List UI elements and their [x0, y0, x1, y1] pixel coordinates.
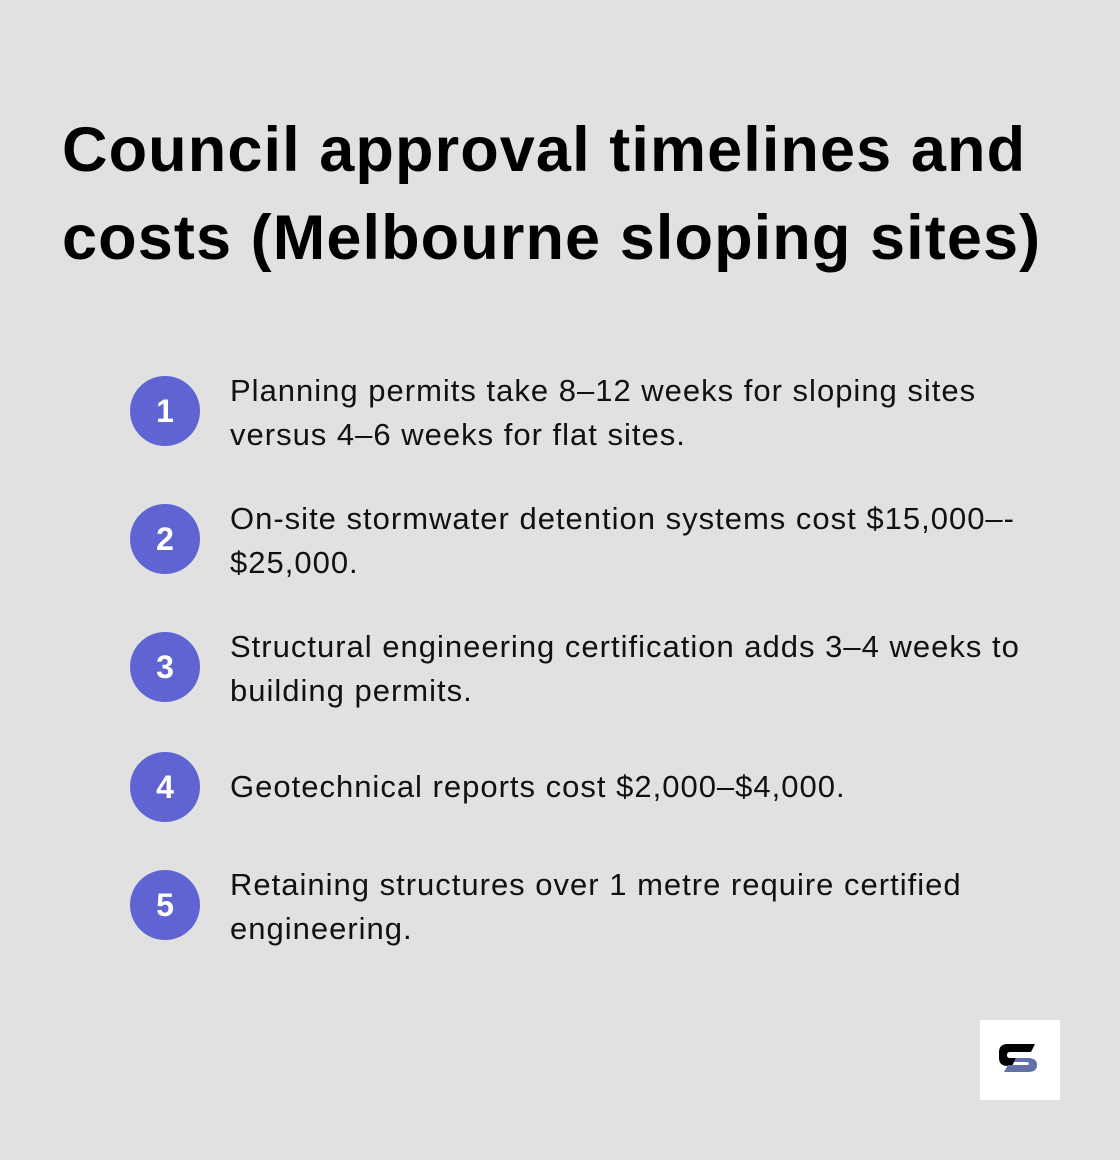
badge 4: 4: [156, 769, 174, 805]
badge 3: 3: [156, 649, 174, 685]
badge 1: [130, 376, 200, 446]
text 2: On-site stormwater detention systems cost $15,000–-: [230, 501, 1015, 536]
badge 2: 2: [156, 521, 174, 557]
item 4: [130, 752, 846, 822]
badge 2: [130, 504, 200, 574]
badge 4: [130, 752, 200, 822]
logo: [980, 1020, 1060, 1100]
badge 5: [130, 870, 200, 940]
text 3: Structural engineering certification adds 3–4 weeks to building permits.: [230, 629, 1020, 708]
text 2: $25,000.: [230, 545, 359, 580]
text 1: Planning permits take 8–12 weeks for sloping sites versus 4–6 weeks for flat sites.: [230, 373, 976, 452]
badge 1: 1: [156, 393, 174, 429]
text 5: Retaining structures over 1 metre require certified engineering.: [230, 867, 962, 946]
item 5: [130, 867, 962, 946]
badge 5: 5: [156, 887, 174, 923]
item 3: [130, 629, 1020, 708]
item 1: [130, 373, 976, 452]
item 2: [130, 501, 1015, 580]
badge 3: [130, 632, 200, 702]
title: Council approval timelines and costs (Melbourne sloping sites): [62, 115, 1041, 273]
text 4: Geotechnical reports cost $2,000–$4,000.: [230, 769, 846, 804]
text 2: [230, 501, 1015, 580]
